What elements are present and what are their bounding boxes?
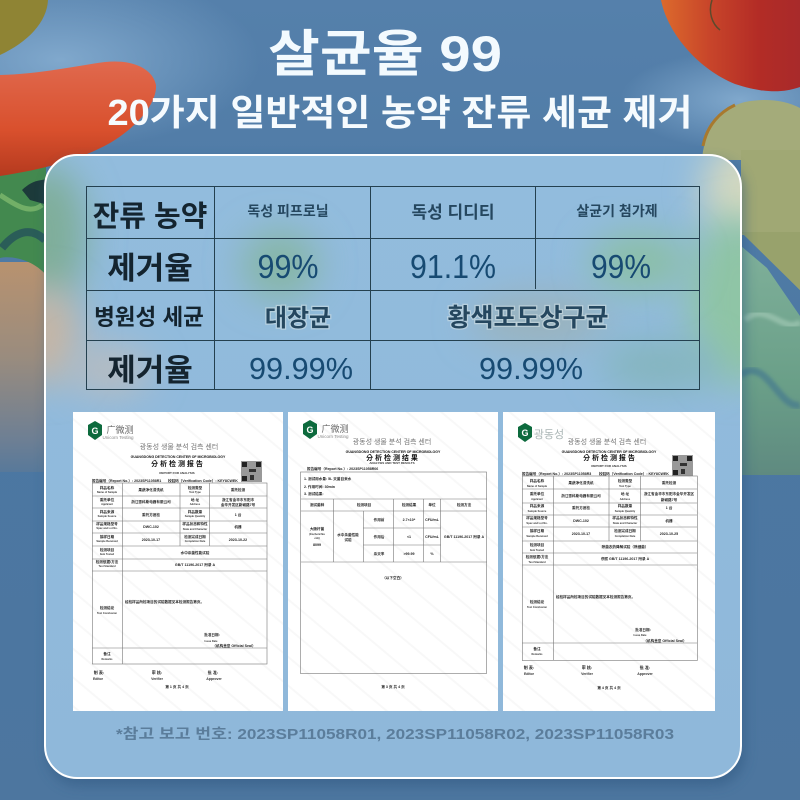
footnote: report numbers: *참고 보고 번호: 2023SP11058R01, 2023SP11058R02, 2023SP11058R03 xyxy=(116,726,674,743)
report table: 浙江省金华市东阳市 xyxy=(222,497,255,502)
report table: 委托单位 xyxy=(530,491,545,496)
result table: <1 xyxy=(407,535,411,539)
report table: 样品规格型号 xyxy=(96,521,118,526)
report table: Test Type xyxy=(189,490,201,494)
report table: 果蔬净化清洗机 xyxy=(568,480,594,485)
signatures: 制 表: xyxy=(94,669,104,675)
result table: 水中杀菌性能 xyxy=(337,532,359,537)
logo xyxy=(88,421,134,440)
report table: 样品来源 xyxy=(530,503,545,508)
report table: Spec and Lot No. xyxy=(96,526,118,530)
report table: Remarks xyxy=(532,652,543,656)
result table: 作用后 xyxy=(374,534,385,539)
document: analysis result 2: 分 析 检 测 结 果 xyxy=(366,453,418,462)
row: pesticide removal rate: 99% xyxy=(591,248,651,285)
report table: State and Character xyxy=(183,527,207,531)
report table: 金华开发区新城路7号 xyxy=(221,502,256,507)
row: pesticide removal rate xyxy=(107,248,651,286)
panel xyxy=(40,153,751,786)
result table: CFU/mL xyxy=(425,535,440,539)
report table: State and Character xyxy=(613,521,637,525)
result table: 8099 xyxy=(313,543,321,547)
image: lettuce right xyxy=(741,246,800,475)
result table: （以下空白） xyxy=(382,575,404,580)
report table: Test Type xyxy=(619,484,631,488)
logo: G xyxy=(91,426,99,436)
document: analysis result 2: 报告编号（Report No.）: 2023SP11058R06 xyxy=(307,466,378,471)
document: analysis result 2: 第 3 页 共 4 页 xyxy=(381,684,405,689)
logo: 광동성 xyxy=(534,428,564,441)
report table: Sample Source xyxy=(98,514,117,518)
report table: 2023-10-17 xyxy=(142,538,160,542)
row: pesticide removal rate: 91.1% xyxy=(410,248,496,285)
row: bacteria removal rate: 99.99% xyxy=(249,351,353,386)
result table: 检测结果 xyxy=(402,502,417,507)
result table: 测试菌种 xyxy=(310,502,325,507)
report table: 接样日期 xyxy=(530,528,545,533)
result table: >99.99 xyxy=(403,552,415,556)
report table: DWC-102 xyxy=(573,519,589,523)
row: pesticide removal rate: 제거율 xyxy=(107,251,193,286)
report table: （机构盖章 Official Seal） xyxy=(212,643,256,648)
image: lettuce left xyxy=(0,155,110,275)
result table: 3. 测试结果: xyxy=(304,491,324,496)
row: pesticide residue xyxy=(93,200,658,233)
report table: Sample Source xyxy=(528,509,547,513)
report table: 参照 GB/T 11196-2017 附录 A xyxy=(601,556,650,561)
report table: 样品规格型号 xyxy=(526,515,548,520)
report table: 委托检测 xyxy=(231,487,246,492)
report table: 批准日期: xyxy=(204,632,220,637)
report table xyxy=(92,483,267,664)
result table: 大肠杆菌 xyxy=(310,526,325,531)
document: analysis report 1: 校验码（Verification Code）: KEY8CWEK xyxy=(168,478,238,483)
result table: 单位 xyxy=(428,502,436,507)
table: removal rates xyxy=(86,186,700,390)
signatures xyxy=(524,664,653,690)
report table: 检测完成日期 xyxy=(614,528,636,533)
document: analysis result 2: GUANGDONG DETECTION CENTER OF MICROBIOLOGY xyxy=(346,450,441,454)
result table: 检测项目 xyxy=(357,502,372,507)
report table: 检测依据/方法 xyxy=(526,554,549,559)
logo: Unicorn Testing xyxy=(318,434,349,439)
signatures: 审 核: xyxy=(152,669,162,675)
report table: 样品状态和特性 xyxy=(612,515,638,520)
report table: 机器 xyxy=(234,524,242,529)
report table: Test Standard xyxy=(528,560,546,564)
result table: CFU/mL xyxy=(425,518,440,522)
QR code xyxy=(672,455,693,476)
logo xyxy=(518,423,564,442)
report table: 委托方送检 xyxy=(142,512,160,517)
report table: 接样日期 xyxy=(100,534,115,539)
report table: 检测类型 xyxy=(188,485,203,490)
result table: GB/T 11196-2017 附录 A xyxy=(444,534,484,539)
row: pesticide residue: 잔류 농약 xyxy=(93,200,207,233)
report table xyxy=(522,476,697,660)
document: analysis report 3: 광동성 생물 분석 검측 센터 xyxy=(568,437,646,446)
report table: Name of Sample xyxy=(527,484,548,488)
result table xyxy=(300,472,487,674)
report table: Sample Received xyxy=(526,534,548,538)
logo: 广微测 xyxy=(321,423,349,434)
report table: 水中杀菌性能试验 xyxy=(181,550,210,555)
report table: Test Standard xyxy=(98,564,116,568)
report table: 地 址 xyxy=(191,497,199,502)
panel tint blobs xyxy=(9,140,788,395)
result table: 试验 xyxy=(344,537,352,542)
row: pathogenic bacteria xyxy=(94,304,609,332)
result table: 检测方法 xyxy=(457,502,472,507)
document: analysis result 2: 광동성 생물 분석 검측 센터 xyxy=(353,437,431,446)
report table: 除菌农药降解试验（除细菌） xyxy=(602,544,648,549)
result table: 1. 测试用水量: 5L 灭菌自来水 xyxy=(304,476,352,481)
report table: Issue Date xyxy=(634,633,647,637)
report table: Completion Date xyxy=(615,534,636,538)
report table: 检测完成日期 xyxy=(184,534,206,539)
report table: Sample Received xyxy=(96,539,118,543)
document: analysis report 3: GUANGDONG DETECTION CENTER OF MICROBIOLOGY xyxy=(562,450,657,454)
report table: 经检样品所检项目的试验数据见本检测报告第页。 xyxy=(556,594,635,599)
document: analysis report 1: 报告编号（Report No.）: 2023SP11058R1 xyxy=(92,478,161,483)
report table: 浙江雪科斯电器有限公司 xyxy=(131,499,171,504)
signatures: 批 准: xyxy=(640,664,650,670)
result table: coli) xyxy=(314,536,320,540)
row: pesticide residue: 살균기 첨가제 xyxy=(576,203,658,219)
logo xyxy=(303,420,349,439)
image: melon right xyxy=(702,100,800,290)
signatures: Editor xyxy=(93,677,104,681)
row: bacteria removal rate xyxy=(107,351,583,388)
QR code xyxy=(241,461,262,482)
document: analysis report 1: 광동성 생물 분석 검측 센터 xyxy=(140,442,218,451)
document: analysis report 1: 分 析 检 测 报 告 xyxy=(151,459,203,468)
document: analysis report 3: 报告编号（Report No.）: 2023SP11058R3 xyxy=(522,471,591,476)
report table: Spec and Lot No. xyxy=(526,521,548,525)
result table: (Escherichia xyxy=(309,532,325,536)
row: pathogenic bacteria: 황색포도상구균 xyxy=(447,304,609,332)
report table: 浙江省金华市东阳市金华开发区 xyxy=(644,491,695,496)
document: analysis report 3: 分 析 检 测 报 告 xyxy=(583,453,635,462)
report table: 样品名称 xyxy=(100,485,115,490)
report table: 样品数量 xyxy=(618,503,633,508)
report table: 机器 xyxy=(665,518,673,523)
signatures: 第 1 页 共 4 页 xyxy=(165,684,189,689)
signatures: 审 核: xyxy=(582,664,592,670)
image: tomato top right xyxy=(661,0,800,91)
signatures: Verifier xyxy=(151,677,164,681)
row: pesticide removal rate: 99% xyxy=(258,248,318,285)
signatures: Approver xyxy=(637,672,653,676)
report table: Remarks xyxy=(102,657,113,661)
report table: Issue Date xyxy=(205,639,218,643)
report table: Test Conclusion xyxy=(527,605,547,609)
report table: 备注 xyxy=(103,651,111,656)
report table: 委托方送检 xyxy=(572,505,590,510)
row: bacteria removal rate: 제거율 xyxy=(107,353,193,388)
report table: 委托单位 xyxy=(100,497,115,502)
document: analysis report 1 xyxy=(73,412,283,711)
report table: Completion Date xyxy=(185,539,206,543)
document: analysis result 2 xyxy=(288,412,498,711)
report table: GB/T 11196-2017 附录 A xyxy=(175,562,215,567)
title: 살균율 99 xyxy=(268,26,502,82)
report table: 1 台 xyxy=(666,505,673,510)
report table: 样品来源 xyxy=(100,509,115,514)
signatures: 制 表: xyxy=(524,664,534,670)
report table: 新城路7号 xyxy=(661,497,678,502)
signatures xyxy=(93,669,222,689)
report table: Test Conclusion xyxy=(97,611,117,615)
report table: Sample Quantity xyxy=(185,514,206,518)
report table: Address xyxy=(190,502,201,506)
report table: 检测结论 xyxy=(530,599,545,604)
result table: 作用前 xyxy=(374,517,385,522)
report table: Applicant xyxy=(101,502,113,506)
row: pathogenic bacteria: 대장균 xyxy=(265,305,331,332)
report table: 2023-10-22 xyxy=(229,538,247,542)
document: analysis report 3 xyxy=(503,412,715,711)
logo: 广微测 xyxy=(106,424,134,435)
signatures: Editor xyxy=(524,672,535,676)
report table: 1 台 xyxy=(235,512,242,517)
report table: 2023-10-17 xyxy=(572,532,590,536)
signatures: Verifier xyxy=(581,672,594,676)
document: analysis report 1: REPORT FOR ANALYSIS xyxy=(159,471,195,475)
subtitle: 20가지 일반적인 농약 잔류 세균 제거 xyxy=(108,92,692,133)
document: analysis report 3: 校验码（Verification Code）: KEY8CWEK xyxy=(599,471,669,476)
row: pathogenic bacteria: 병원성 세균 xyxy=(94,305,204,330)
report table: 经检样品所检项目的试验数据见本检测报告第页。 xyxy=(125,599,204,604)
report table: 地 址 xyxy=(621,491,629,496)
row: bacteria removal rate: 99.99% xyxy=(479,351,583,386)
report table: 浙江雪科斯电器有限公司 xyxy=(561,493,601,498)
report table: 样品名称 xyxy=(530,478,545,483)
report table: 备注 xyxy=(533,646,541,651)
report table: Name of Sample xyxy=(97,490,118,494)
image: carrot xyxy=(0,62,156,176)
signatures: Approver xyxy=(206,677,222,681)
document: analysis report 1: GUANGDONG DETECTION CENTER OF MICROBIOLOGY xyxy=(131,455,226,459)
report table: 批准日期: xyxy=(635,627,651,632)
logo: G xyxy=(521,428,529,438)
report table: （机构盖章 Official Seal） xyxy=(643,638,687,643)
logo: G xyxy=(306,425,314,435)
report table: Applicant xyxy=(531,497,543,501)
report table: 果蔬净化清洗机 xyxy=(138,487,164,492)
report table: 检测依据/方法 xyxy=(96,559,119,564)
report table: Sample Quantity xyxy=(615,509,636,513)
report table: 检测项目 xyxy=(530,542,545,547)
report table: 检测类型 xyxy=(618,478,633,483)
report table: 2023-10-25 xyxy=(660,532,678,536)
report table: 检测结论 xyxy=(100,605,115,610)
report table: DWC-102 xyxy=(143,525,159,529)
result table: 2. 作用时间: 30min xyxy=(304,484,335,489)
document: analysis report 3: REPORT FOR ANALYSIS xyxy=(591,464,627,468)
report table: Item Tested xyxy=(100,552,115,556)
result table: 2.7×10⁶ xyxy=(403,518,416,522)
report table: 样品数量 xyxy=(188,509,203,514)
document: analysis result 2: ANALYSIS AND TEST RESULTS xyxy=(369,461,415,465)
report table: Item Tested xyxy=(530,548,545,552)
result table: % xyxy=(430,552,434,556)
image: lime top left xyxy=(0,0,48,55)
report table: 检测项目 xyxy=(100,547,115,552)
signatures: 第 4 页 共 4 页 xyxy=(597,685,621,690)
row: pesticide residue: 독성 피프로닐 xyxy=(247,203,329,219)
report table: Address xyxy=(620,497,631,501)
row: pesticide residue: 독성 디디티 xyxy=(412,203,494,222)
report table: 委托检测 xyxy=(662,480,677,485)
image: left tan blur xyxy=(0,262,46,472)
signatures: 批 准: xyxy=(208,669,218,675)
logo: Unicorn Testing xyxy=(103,435,134,440)
report table: 样品状态和特性 xyxy=(182,521,208,526)
result table: 杀灭率 xyxy=(374,551,385,556)
